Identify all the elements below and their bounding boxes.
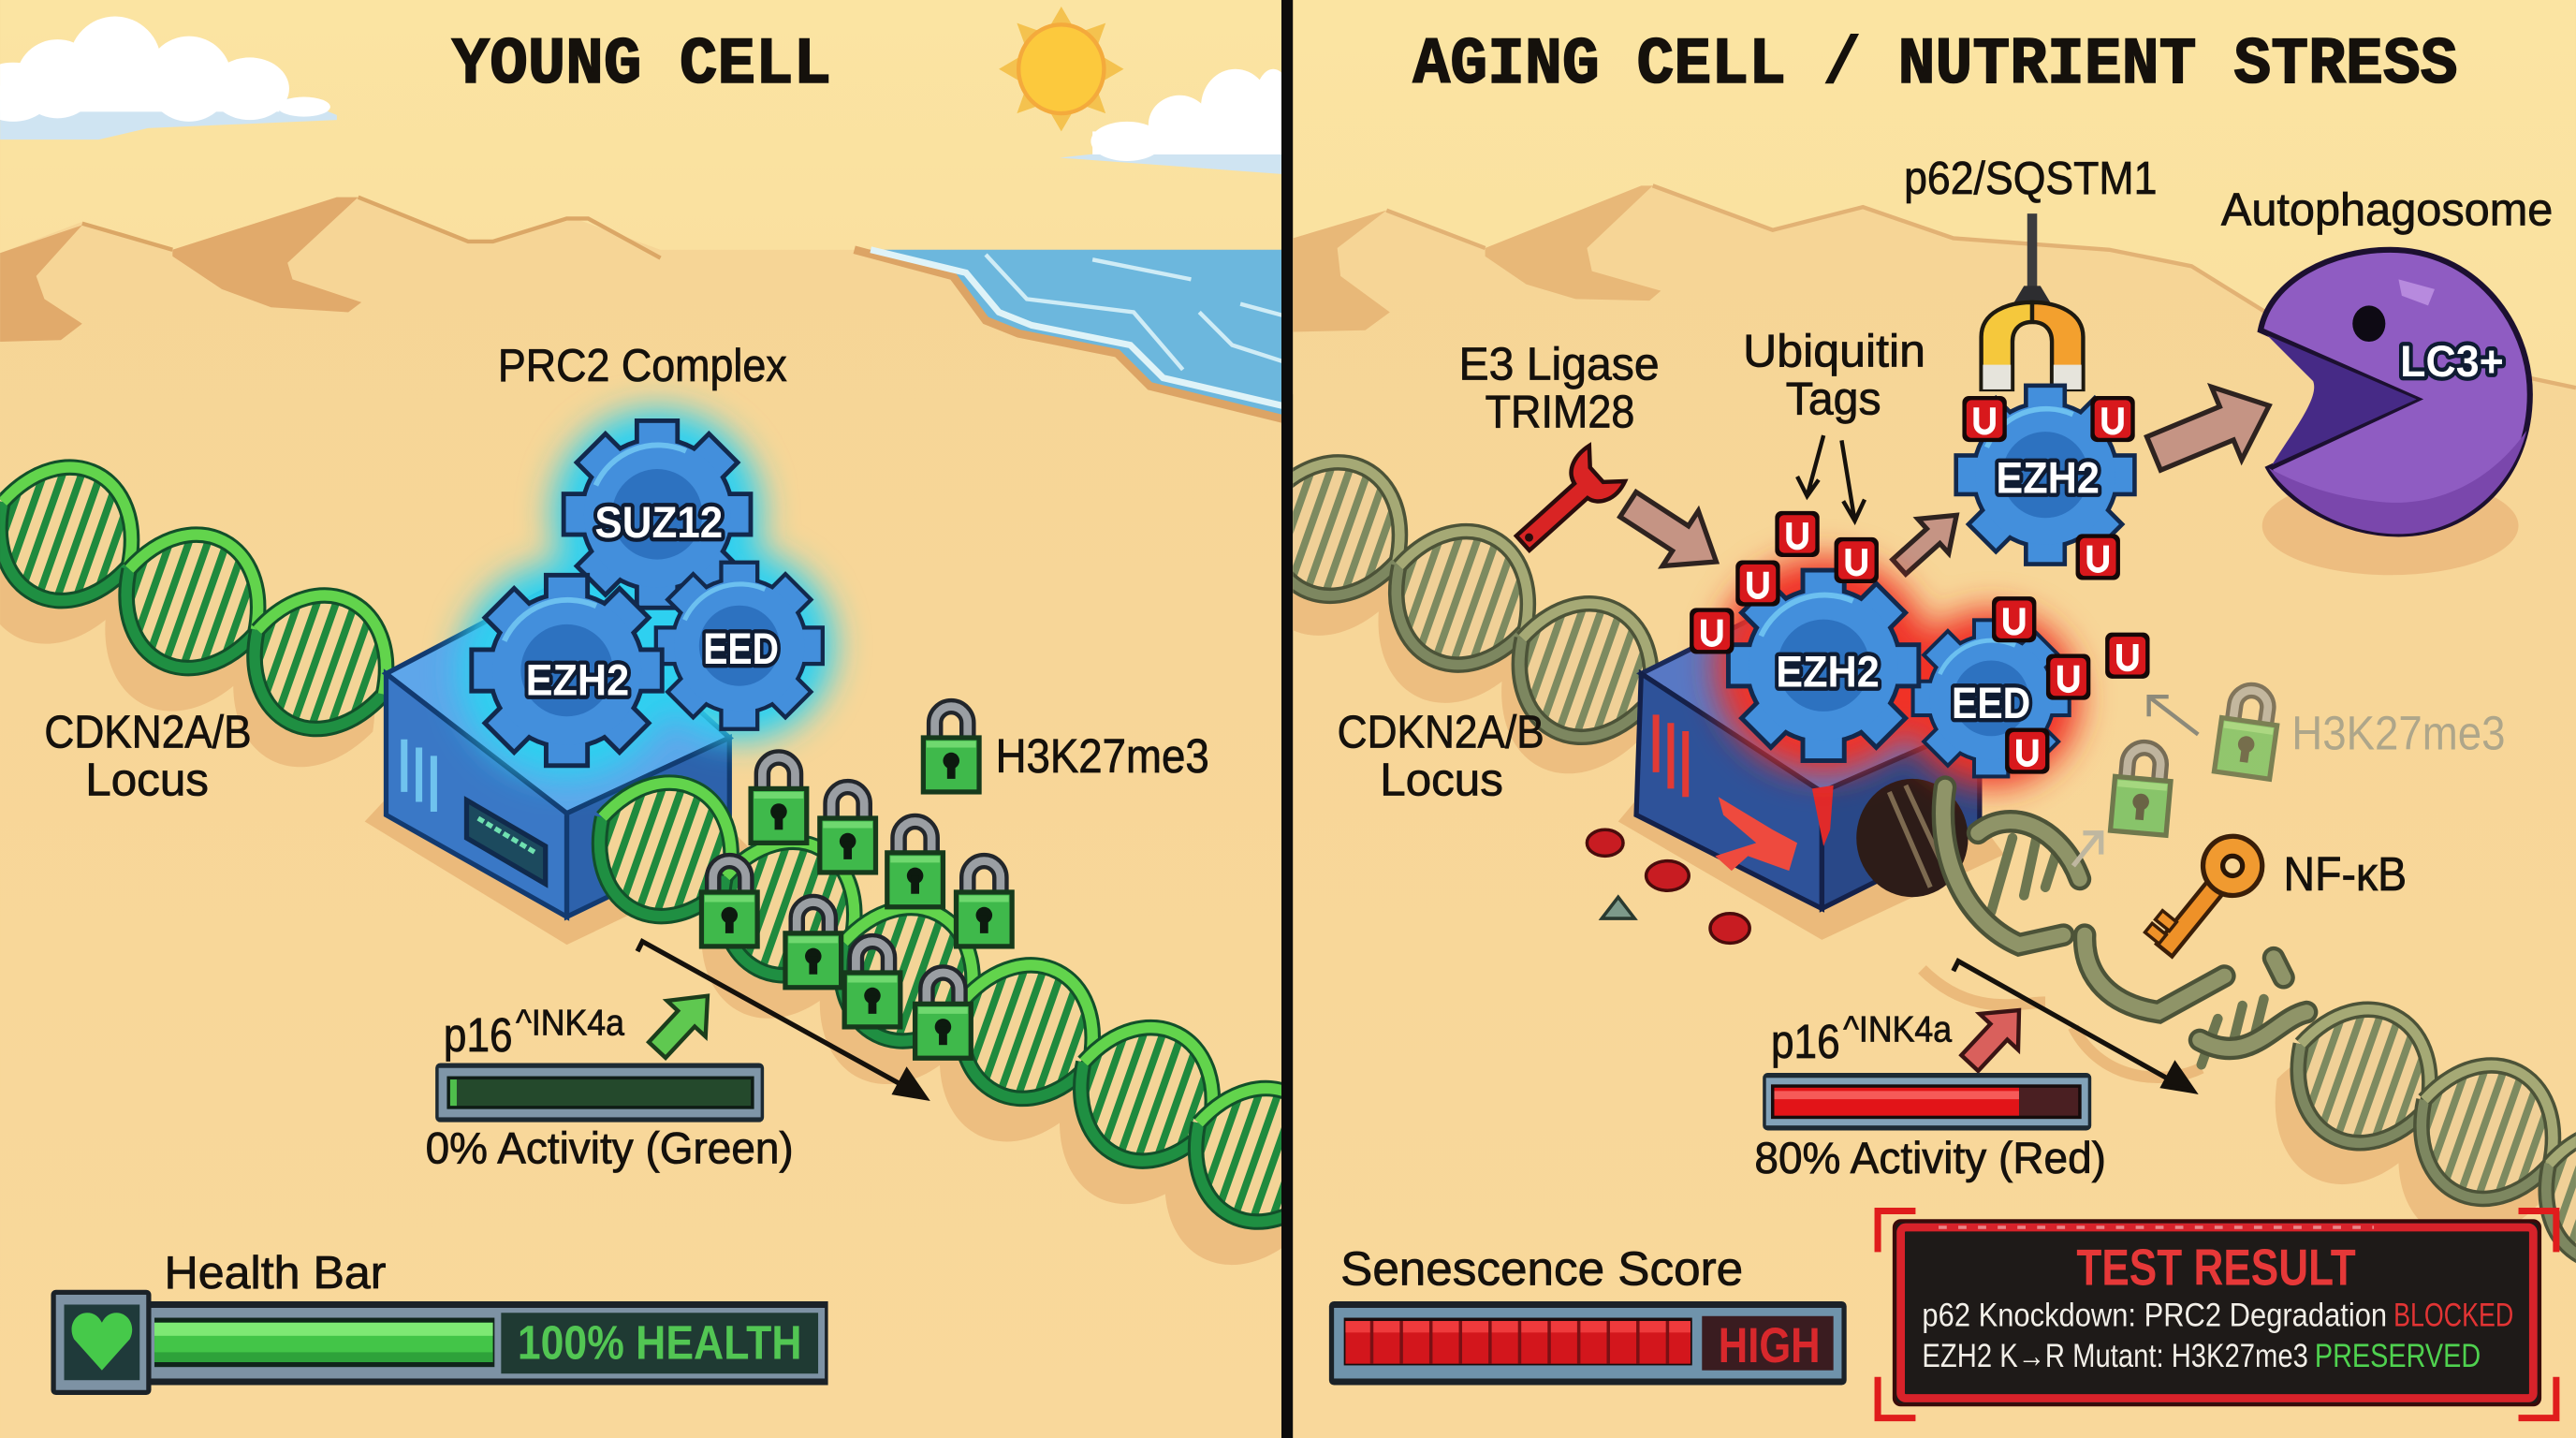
- icon: wrench TRIM28: [1503, 444, 1627, 563]
- label: PRC2 complex: PRC2 Complex: [498, 341, 787, 391]
- value: 100% health: 100% HEALTH: [518, 1315, 802, 1369]
- label: NF-kB: NF-κB: [2284, 847, 2407, 901]
- panel: aging cell: [1222, 0, 2576, 1438]
- label: p16 INK4a: ^INK4a: [516, 1004, 624, 1044]
- gear: EZH2: [469, 573, 665, 768]
- cloud left: [0, 17, 337, 139]
- autophagosome pacman: [2261, 250, 2530, 575]
- dna strand upper left: [0, 459, 395, 738]
- gear: SUZ12: [562, 418, 753, 610]
- result line: EZH2: PRESERVED: [2315, 1338, 2481, 1374]
- value: HIGH: HIGH: [1719, 1318, 1821, 1373]
- gear: SUZ12: SUZ12: [594, 498, 723, 548]
- torn dna fragments: [1943, 787, 2306, 1064]
- sand background left: [10, 198, 886, 262]
- arrow: to autophagosome: [2139, 369, 2284, 490]
- result line: EZH2: EZH2 K→R Mutant: H3K27me3: [1922, 1338, 2308, 1374]
- label: activity green: 0% Activity (Green): [426, 1124, 794, 1174]
- dna shadow left: [0, 475, 1337, 1293]
- bar: health: [51, 1290, 828, 1395]
- title: young cell: YOUNG CELL: [452, 29, 831, 103]
- ghost label H3K27me3: H3K27me3: [2291, 706, 2505, 759]
- label: E3 ligase: E3 Ligase: [1459, 339, 1660, 389]
- sky background left: [0, 0, 1283, 263]
- dna shadow right: [1222, 466, 2570, 1269]
- label: H3K27me3: H3K27me3: [996, 729, 1209, 783]
- gear: EZH2: EZH2: [526, 655, 629, 705]
- label: E3 ligase: TRIM28: [1486, 387, 1634, 437]
- arrow: faded lock release: [2073, 833, 2101, 866]
- label: senescence score: Senescence Score: [1340, 1241, 1743, 1295]
- ocean: [855, 250, 1283, 419]
- icon: legend lock: [923, 707, 979, 792]
- arrow: ghost lock release: [2149, 697, 2198, 734]
- label: CDKN2A/B locus right: Locus: [1380, 755, 1503, 805]
- arrow: p16 up red: [1951, 992, 2039, 1081]
- panel: young cell: [0, 0, 1364, 1438]
- ghost lock large: [2214, 687, 2281, 779]
- label: health bar: Health Bar: [165, 1248, 386, 1299]
- dna strand upper right: [1237, 431, 1688, 771]
- label: p16 INK4a right: ^INK4a: [1843, 1010, 1953, 1050]
- gear: EZH2 damaged: EZH2: [1776, 648, 1880, 697]
- p62 magnet: [1982, 213, 2083, 389]
- cloud right: [1060, 69, 1293, 174]
- arrow: gear to magnet: [1883, 498, 1972, 584]
- gear: EED damaged: [1911, 596, 2150, 778]
- dna strand lower: [592, 774, 1281, 1230]
- label: p16 INK4a: [446, 1009, 625, 1062]
- gear: EZH2 captured: EZH2: [1996, 454, 2100, 504]
- arrow: wrench to gear: [1610, 477, 1734, 589]
- methylation locks: [701, 757, 1012, 1058]
- test result box: [1878, 1211, 2556, 1418]
- label: LC3+: LC3+: [2400, 337, 2504, 387]
- arrow: transcription right: [1954, 961, 2193, 1091]
- gear: EZH2 damaged: [1690, 511, 1921, 763]
- label: ubiquitin tags: Ubiquitin: [1743, 326, 1925, 376]
- icon: NF-kB key: [2142, 824, 2275, 969]
- label: CDKN2A/B locus: CDKN2A/B: [44, 708, 252, 758]
- label: autophagosome: Autophagosome: [2221, 184, 2553, 235]
- dunes left: [0, 198, 661, 342]
- sun: [999, 7, 1123, 131]
- label: p16 INK4a: p16: [444, 1008, 513, 1062]
- gear glow: [459, 409, 835, 779]
- icon: heart: [51, 1290, 152, 1395]
- title: aging cell: AGING CELL / NUTRIENT STRESS: [1412, 29, 2458, 103]
- gear: EED damaged: EED: [1952, 679, 2030, 728]
- label: CDKN2A/B locus right: CDKN2A/B: [1338, 708, 1544, 758]
- red gear glow: [1715, 557, 2080, 787]
- arrow: transcription: [637, 942, 925, 1097]
- result line: p62: p62 Knockdown: PRC2 Degradation: [1922, 1297, 2387, 1333]
- gear: EED: [654, 561, 825, 731]
- label: ubiquitin tags: Tags: [1786, 374, 1881, 424]
- label: activity red: 80% Activity (Red): [1754, 1134, 2106, 1183]
- label: p16 INK4a right: [1771, 1010, 1953, 1068]
- label: CDKN2A/B locus: Locus: [85, 755, 209, 805]
- ghost lock small: [2111, 745, 2174, 835]
- debris: [1587, 829, 1749, 943]
- dna strand lower right: [2267, 978, 2576, 1297]
- label: p16 INK4a right: p16: [1771, 1015, 1840, 1068]
- damaged box: [1618, 592, 2004, 940]
- chromatin box: [365, 583, 755, 945]
- dunes right: [1293, 185, 2576, 388]
- bar: p16 activity red: [1763, 1073, 2091, 1130]
- sky background right: [1293, 0, 2576, 394]
- result line: p62: BLOCKED: [2393, 1297, 2513, 1333]
- gear: EED: EED: [703, 624, 779, 674]
- arrow: p16 up green: [646, 993, 710, 1061]
- label: p62: p62/SQSTM1: [1904, 154, 2157, 204]
- arrows: ubiquitin pointers: [1797, 435, 1865, 521]
- divider: [1281, 0, 1293, 1438]
- heading: test result: TEST RESULT: [2076, 1239, 2356, 1296]
- bar: p16 activity: [435, 1064, 764, 1123]
- prc2 gears: [459, 409, 835, 779]
- sand background right: [1293, 185, 2576, 1438]
- bar: senescence: [1329, 1301, 1847, 1385]
- gear: EZH2 captured: [1954, 384, 2137, 580]
